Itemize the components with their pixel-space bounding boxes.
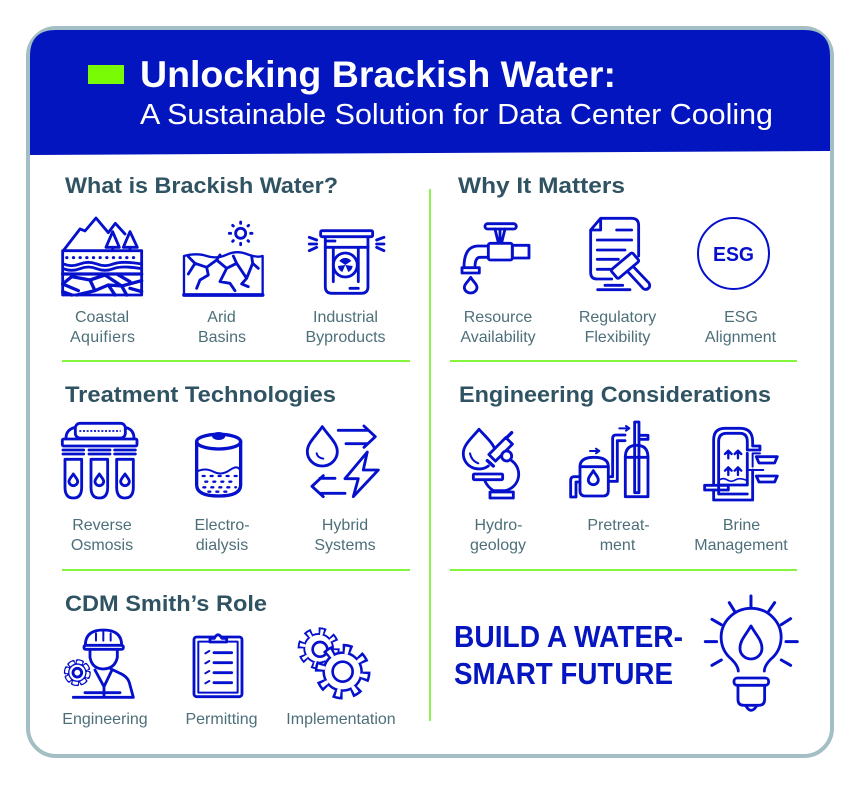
panel: What is Brackish Water? xyxy=(63,173,386,346)
icon: clipboard checklist xyxy=(194,635,242,697)
label: Byproducts xyxy=(305,329,386,346)
item: regulatory flexibility xyxy=(579,218,656,346)
label: Reverse xyxy=(72,517,132,534)
icon: coastal aquifer xyxy=(63,218,142,295)
icon: water drop and microscope xyxy=(463,429,519,498)
icon: arid basin with sun xyxy=(184,222,263,295)
label xyxy=(587,517,650,554)
label xyxy=(470,517,526,554)
icon: ESG badge: ESG xyxy=(713,244,754,266)
panel: Why It Matters xyxy=(458,173,777,346)
icon: reverse osmosis filters xyxy=(62,423,137,498)
label: Osmosis xyxy=(71,537,133,554)
label xyxy=(71,517,133,554)
item: electrodialysis xyxy=(194,432,250,554)
item: pretreatment xyxy=(571,422,650,554)
item: arid basins xyxy=(184,222,263,346)
slogan xyxy=(454,619,683,691)
label: Flexibility xyxy=(585,329,650,346)
label xyxy=(579,309,656,346)
icon: dripping faucet xyxy=(462,224,529,293)
label: Brine xyxy=(723,517,760,534)
label: Coastal xyxy=(75,309,129,326)
heading: Why It Matters xyxy=(458,173,625,198)
panel: Engineering Considerations xyxy=(459,382,788,554)
item: hydrogeology xyxy=(463,429,526,554)
item: engineering xyxy=(62,630,148,728)
label: Basins xyxy=(198,329,246,346)
icon: electrodialysis cell xyxy=(197,432,241,496)
icon: document with gavel xyxy=(591,218,650,290)
icon: light bulb with water drop xyxy=(705,596,797,710)
label: Resource xyxy=(464,309,532,326)
label: dialysis xyxy=(196,537,248,554)
label: Industrial xyxy=(313,309,378,326)
label: Implementation xyxy=(286,711,396,728)
heading: CDM Smith’s Role xyxy=(65,591,267,616)
call to action xyxy=(454,596,797,710)
item: coastal aquifiers xyxy=(63,218,142,346)
label xyxy=(194,517,250,554)
header banner xyxy=(30,30,830,155)
label: Hydro- xyxy=(474,517,523,534)
icon: water, energy and arrows xyxy=(307,426,378,497)
label: Permitting xyxy=(185,711,258,728)
label: Management xyxy=(694,537,788,554)
heading: Engineering Considerations xyxy=(459,382,771,407)
icon: pretreatment tanks xyxy=(571,422,648,497)
label: Systems xyxy=(314,537,376,554)
heading: What is Brackish Water? xyxy=(65,173,338,198)
item: hybrid systems xyxy=(307,426,378,554)
slogan: SMART FUTURE xyxy=(454,656,673,691)
label xyxy=(705,309,777,346)
item: permitting xyxy=(185,635,258,728)
subtitle: A Sustainable Solution for Data Center Cooling xyxy=(140,99,773,131)
label: ESG xyxy=(724,309,758,326)
label: Electro- xyxy=(194,517,250,534)
label: Arid xyxy=(207,309,236,326)
label xyxy=(305,309,386,346)
label xyxy=(460,309,536,346)
green accent block xyxy=(88,65,124,84)
item: brine management xyxy=(694,428,788,554)
item: industrial byproducts xyxy=(305,231,386,346)
label: geology xyxy=(470,537,526,554)
icon: industrial waste container xyxy=(309,231,384,293)
title: Unlocking Brackish Water: xyxy=(140,54,616,95)
label: Hybrid xyxy=(322,517,368,534)
label xyxy=(70,309,135,346)
heading: Treatment Technologies xyxy=(65,382,336,407)
label xyxy=(694,517,788,554)
label: ment xyxy=(600,537,636,554)
label: Aquifiers xyxy=(70,329,135,346)
horizontal dividers xyxy=(62,360,797,571)
panel: Treatment Technologies xyxy=(62,382,378,554)
label xyxy=(198,309,246,346)
slogan: BUILD A WATER- xyxy=(454,619,683,654)
icon: engineer with gear xyxy=(66,630,133,697)
icon: interlocking gears xyxy=(300,630,367,696)
item: resource availability xyxy=(460,224,536,346)
label: Availability xyxy=(460,329,536,346)
panel: CDM Smith's Role xyxy=(62,591,396,728)
label: Regulatory xyxy=(579,309,656,326)
item: reverse osmosis xyxy=(62,423,137,554)
item: ESG alignment xyxy=(698,218,777,346)
label xyxy=(314,517,376,554)
label: Pretreat- xyxy=(587,517,650,534)
icon: brine treatment tower xyxy=(705,428,777,500)
label: Engineering xyxy=(62,711,148,728)
label: Alignment xyxy=(705,329,777,346)
vertical divider xyxy=(429,189,431,721)
item: implementation xyxy=(286,630,396,728)
